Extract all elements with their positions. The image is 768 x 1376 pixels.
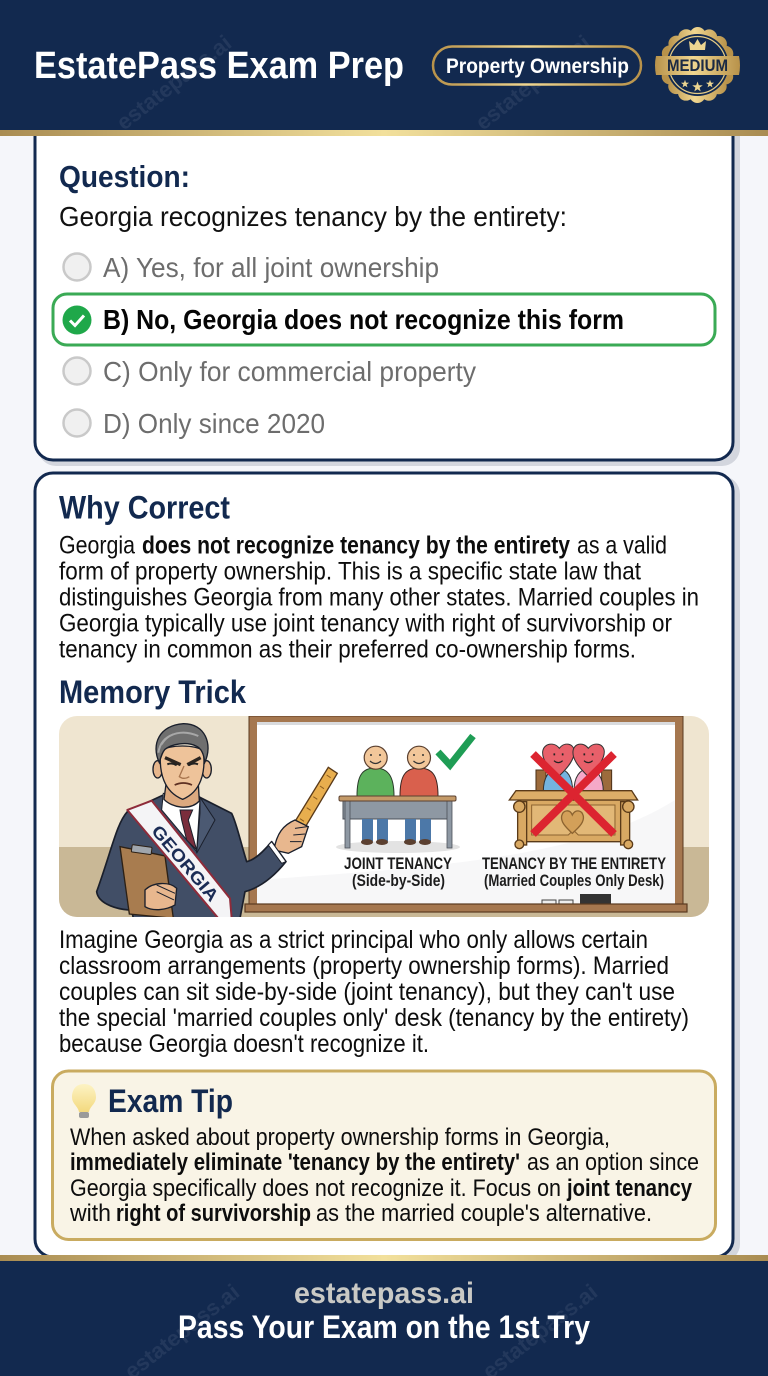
title: EstatePass Exam Prep	[34, 45, 404, 87]
text block: why correct explanation: as a valid	[577, 532, 667, 560]
header band	[0, 0, 768, 136]
panel: question card	[35, 100, 740, 466]
pointing hand	[274, 820, 308, 853]
character head	[153, 724, 211, 807]
holding hand	[145, 884, 177, 910]
option C: C) Only for commercial property	[103, 356, 476, 387]
question text: Georgia recognizes tenancy by the entirety:	[59, 201, 567, 232]
label: joint tenancy: JOINT TENANCY	[344, 855, 452, 873]
character: Georgia principal	[97, 767, 337, 918]
difficulty badge	[655, 33, 740, 97]
text block: memory trick explanation	[59, 926, 689, 1058]
clipboard	[120, 845, 173, 918]
illustration: strict principal at a whiteboard	[59, 716, 709, 918]
text block: memory trick explanation: Imagine Georgia as a strict principal who only allows certain	[59, 926, 648, 954]
sash	[127, 801, 232, 918]
heading: Question: Question:	[59, 159, 190, 194]
crown	[689, 39, 706, 50]
header band: estatepass.ai	[471, 30, 595, 135]
panel: exam tip	[52, 1071, 716, 1240]
header band: estatepass.ai	[112, 30, 236, 135]
category pill	[433, 46, 641, 84]
suit	[97, 795, 286, 918]
text block: exam tip: as the married couple's alternative.	[316, 1200, 652, 1227]
text block: exam tip: Georgia specifically does not recognize it. Focus on	[70, 1175, 561, 1202]
ruler	[296, 766, 338, 826]
difficulty badge: MEDIUM	[667, 57, 728, 75]
text block: memory trick explanation: the special 'married couples only' desk (tenancy by the entirety)	[59, 1004, 689, 1032]
heading: Memory Trick: Memory Trick	[59, 674, 246, 710]
text block: why correct explanation: tenancy in common as their preferred co-ownership forms.	[59, 636, 636, 664]
text block: exam tip: When asked about property ownership forms in Georgia,	[70, 1124, 610, 1151]
text block: exam tip: with	[69, 1200, 111, 1227]
whiteboard drawing: joint tenancy side-by-side	[336, 746, 460, 853]
text block: why correct explanation: Georgia	[59, 532, 135, 560]
label: joint tenancy: (Side-by-Side)	[352, 872, 445, 890]
option B: correct answer	[53, 294, 715, 345]
text block: exam tip: as an option since	[527, 1149, 699, 1176]
stars	[681, 80, 714, 91]
text block: why correct explanation: Georgia typically use joint tenancy with right of survivorship or	[59, 610, 672, 638]
text block: exam tip: immediately eliminate 'tenancy by the entirety'	[70, 1149, 520, 1176]
icon: red X	[533, 754, 614, 834]
whiteboard drawing: married couples desk crossed out	[509, 744, 638, 849]
text block: why correct explanation: does not recognize tenancy by the entirety	[142, 532, 570, 560]
sash: GEORGIA	[148, 821, 223, 906]
heading: Why Correct: Why Correct	[59, 490, 230, 526]
footer band	[0, 1255, 768, 1376]
text block: why correct explanation: form of property ownership. This is a specific state law that	[59, 558, 641, 586]
label: joint tenancy	[344, 855, 452, 890]
label: tenancy by the entirety: TENANCY BY THE ENTIRETY	[482, 855, 666, 873]
icon: light bulb	[72, 1084, 96, 1118]
text block: exam tip	[69, 1124, 699, 1227]
category pill: Property Ownership	[446, 54, 629, 78]
whiteboard	[245, 716, 687, 912]
option D: D) Only since 2020	[103, 408, 325, 439]
text block: why correct explanation	[59, 532, 699, 664]
text block: why correct explanation: distinguishes Georgia from many other states. Married couples in	[59, 584, 699, 612]
label: tenancy by the entirety	[482, 855, 666, 890]
footer tagline: Pass Your Exam on the 1st Try	[178, 1309, 590, 1345]
text block: memory trick explanation: couples can sit side-by-side (joint tenancy), but they can't use	[59, 978, 675, 1006]
label: tenancy by the entirety: (Married Couples Only Desk)	[484, 872, 664, 890]
text block: exam tip: joint tenancy	[566, 1175, 692, 1202]
footer site name: estatepass.ai	[294, 1277, 474, 1310]
cuff	[268, 842, 286, 863]
icon: green check	[438, 736, 473, 765]
panel: explanation card	[35, 473, 740, 1262]
option A: A) Yes, for all joint ownership	[103, 252, 439, 283]
text block: memory trick explanation: because Georgia doesn't recognize it.	[59, 1030, 429, 1058]
text block: memory trick explanation: classroom arrangements (property ownership forms). Married	[59, 952, 669, 980]
heading: Exam Tip: Exam Tip	[108, 1083, 233, 1119]
option B: correct answer: B) No, Georgia does not recognize this form	[103, 304, 624, 335]
text block: exam tip: right of survivorship	[116, 1200, 311, 1227]
